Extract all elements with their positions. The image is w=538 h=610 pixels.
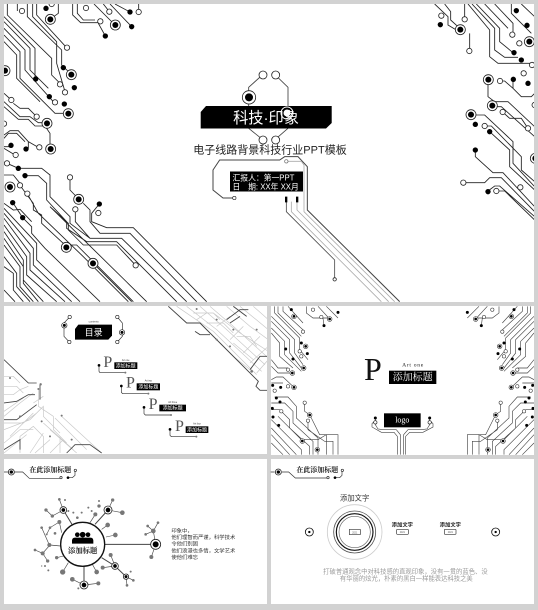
title banner: 科技·印象 (233, 110, 299, 127)
section title: 添加标题 (393, 371, 433, 384)
panel: contents slide (4, 306, 268, 454)
contents heading: contents (89, 319, 99, 323)
label 2: 2021 (448, 532, 454, 534)
network description: 印象中， (171, 526, 193, 534)
contents heading: 目录 (85, 328, 103, 338)
contents heading (75, 319, 112, 340)
network small nodes (34, 498, 159, 589)
contents item 2: Art two (145, 380, 153, 383)
contents item 2 (120, 375, 160, 395)
circuit: cover left cluster (0, 1, 207, 302)
label 2: 添加文字 (440, 520, 461, 528)
circuit: section right cluster (466, 306, 534, 455)
network description: 令他们别固 (171, 539, 198, 547)
contents item 1: P (103, 354, 112, 371)
contents item 1: Art one (122, 359, 130, 362)
network spokes (35, 499, 158, 585)
contents item 4: 添加标题 (187, 426, 207, 433)
panel: cover slide (0, 1, 538, 302)
contents item 2: P (126, 375, 135, 392)
circuit: section left cluster (271, 306, 339, 455)
left marker (305, 528, 313, 536)
contents item 3: 添加标题 (163, 405, 183, 412)
slide header (271, 465, 343, 479)
contents item 4: Art four (193, 422, 201, 425)
right marker (492, 528, 500, 536)
network center circle (61, 522, 105, 566)
contents heading circuit ornaments (62, 315, 125, 344)
circuit: top right grey (168, 306, 268, 390)
title banner (201, 106, 332, 128)
contents item 2: 添加标题 (138, 383, 158, 390)
network description: 使他们难忘 (171, 553, 199, 561)
contents item 1: 添加标题 (116, 362, 136, 369)
network description: 他们理智而严谨，科学技术 (171, 533, 236, 541)
description: 打破普通观念中对科技感的直观印象，没有一贯的蓝色、没 (323, 566, 488, 575)
contents item 3: Art three (168, 401, 178, 404)
label 1: 2021 (400, 532, 406, 534)
icon: people (72, 532, 93, 544)
section label: Art one (402, 363, 424, 369)
info box (230, 172, 303, 192)
contents item 3: P (149, 396, 158, 413)
contents item 4: P (175, 418, 184, 435)
logo box: logo (395, 415, 409, 424)
circuit: logo connectors (372, 416, 433, 455)
contents item 3 (143, 396, 186, 416)
concentric rings: 2021 (352, 532, 358, 534)
network hubs (60, 506, 161, 589)
label 1: 添加文字 (392, 520, 413, 528)
concentric rings (327, 505, 382, 559)
circuit: cover right cluster (435, 4, 538, 220)
info box: 汇报人：第一PPT (232, 172, 295, 182)
panel: rings slide (271, 459, 534, 604)
slide header: 在此添加标题 (29, 465, 71, 474)
slide header (4, 465, 76, 479)
logo box (384, 413, 421, 427)
info box: 日 期: XX年 XX月 (232, 182, 299, 192)
ring heading: 添加文字 (340, 494, 369, 503)
slide header: 在此添加标题 (296, 465, 338, 474)
label 1 (392, 520, 413, 534)
network description: 他们浪漫也多情，文学艺术 (171, 546, 236, 554)
contents item 4 (169, 418, 208, 438)
label 2 (440, 520, 461, 534)
section letter: P (364, 351, 382, 387)
panel: network slide (4, 459, 267, 604)
description: 有华丽的炫光，朴素的黑白一样能表达科技之美 (340, 574, 473, 583)
rings under banner (259, 136, 280, 144)
circuit: bottom left grey (4, 360, 102, 453)
network center circle: 添加标题 (68, 546, 98, 555)
section title (389, 371, 436, 384)
contents item 1 (98, 354, 137, 374)
subtitle: 电子线路背景科技行业PPT模板 (193, 142, 347, 156)
panel: section slide (271, 306, 534, 455)
circuit: center connectors (213, 71, 400, 302)
